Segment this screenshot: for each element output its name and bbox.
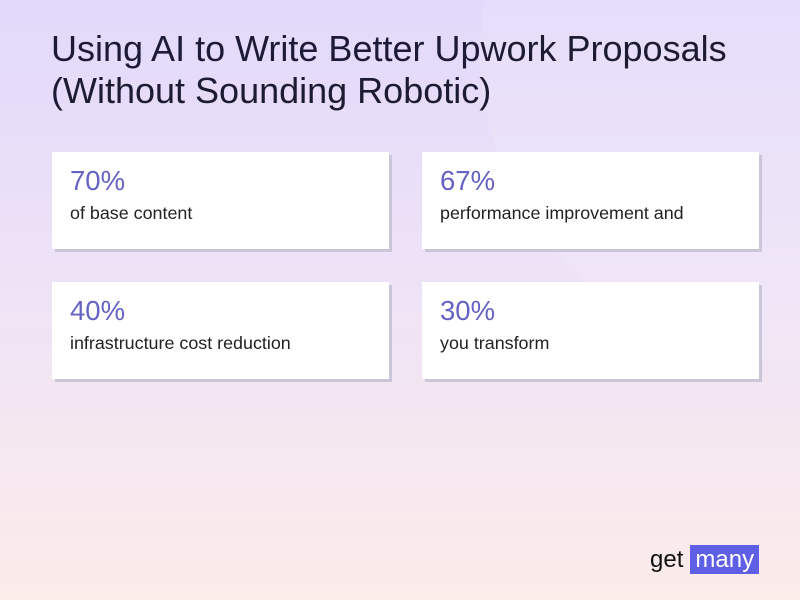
title: Using AI to Write Better Upwork Proposals bbox=[51, 28, 727, 69]
title: (Without Sounding Robotic) bbox=[51, 70, 491, 111]
card: 70%: of base content bbox=[70, 203, 192, 223]
title bbox=[51, 28, 727, 111]
card: 70%: 70% bbox=[70, 165, 125, 196]
card: 30% bbox=[422, 282, 759, 379]
card: 30%: 30% bbox=[440, 295, 495, 326]
card: 70% bbox=[52, 152, 389, 249]
card: 30%: you transform bbox=[440, 333, 549, 353]
logo: get bbox=[650, 546, 683, 573]
card: 67%: 67% bbox=[440, 165, 495, 196]
card: 67% bbox=[422, 152, 759, 249]
card: 67%: performance improvement and bbox=[440, 203, 684, 223]
logo bbox=[650, 545, 759, 574]
card: 40%: infrastructure cost reduction bbox=[70, 333, 291, 353]
card: 40%: 40% bbox=[70, 295, 125, 326]
logo: many bbox=[695, 546, 754, 573]
card: 40% bbox=[52, 282, 389, 379]
